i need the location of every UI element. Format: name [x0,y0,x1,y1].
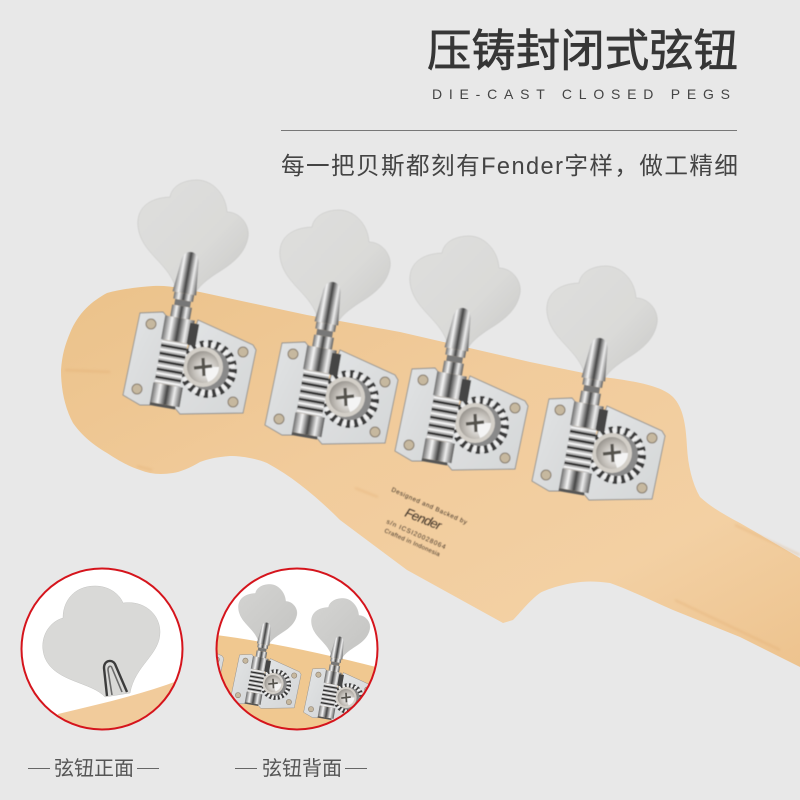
fender logo text: Fender [403,505,444,533]
caption: back of peg: 弦钮背面 [262,757,342,780]
peg shaft [104,661,127,696]
description text: 每一把贝斯都刻有Fender字样，做工精细 [281,153,738,180]
caption: front of peg: 弦钮正面 [54,757,134,780]
bass headstock [61,180,800,667]
fender logo text: Designed and Backed by [390,486,469,527]
inset circle: back of peg [216,568,378,730]
title: 压铸封闭式弦钮 [427,27,738,76]
fender logo text: s/n ICSI20028064 [385,518,447,551]
tuning peg 1 [123,180,256,414]
left tuner [231,584,301,708]
caption: back of peg [235,757,367,780]
headstock wood [61,286,800,667]
wood grain [65,370,800,650]
caption: front of peg [28,757,159,780]
peg button front [43,586,160,697]
tuning peg 3 [395,236,528,470]
tuning peg 4 [532,266,665,500]
fender logo text: Crafted in Indonesia [383,528,441,558]
fender logo text [383,486,469,558]
wood edge [218,635,374,728]
tuning peg 2 [265,210,398,444]
subtitle: DIE-CAST CLOSED PEGS [432,86,730,102]
right tuner [304,598,374,722]
inset circle: front of peg [22,568,190,740]
partial tuner [218,654,224,672]
wood edge [58,682,174,728]
divider line [281,130,737,131]
